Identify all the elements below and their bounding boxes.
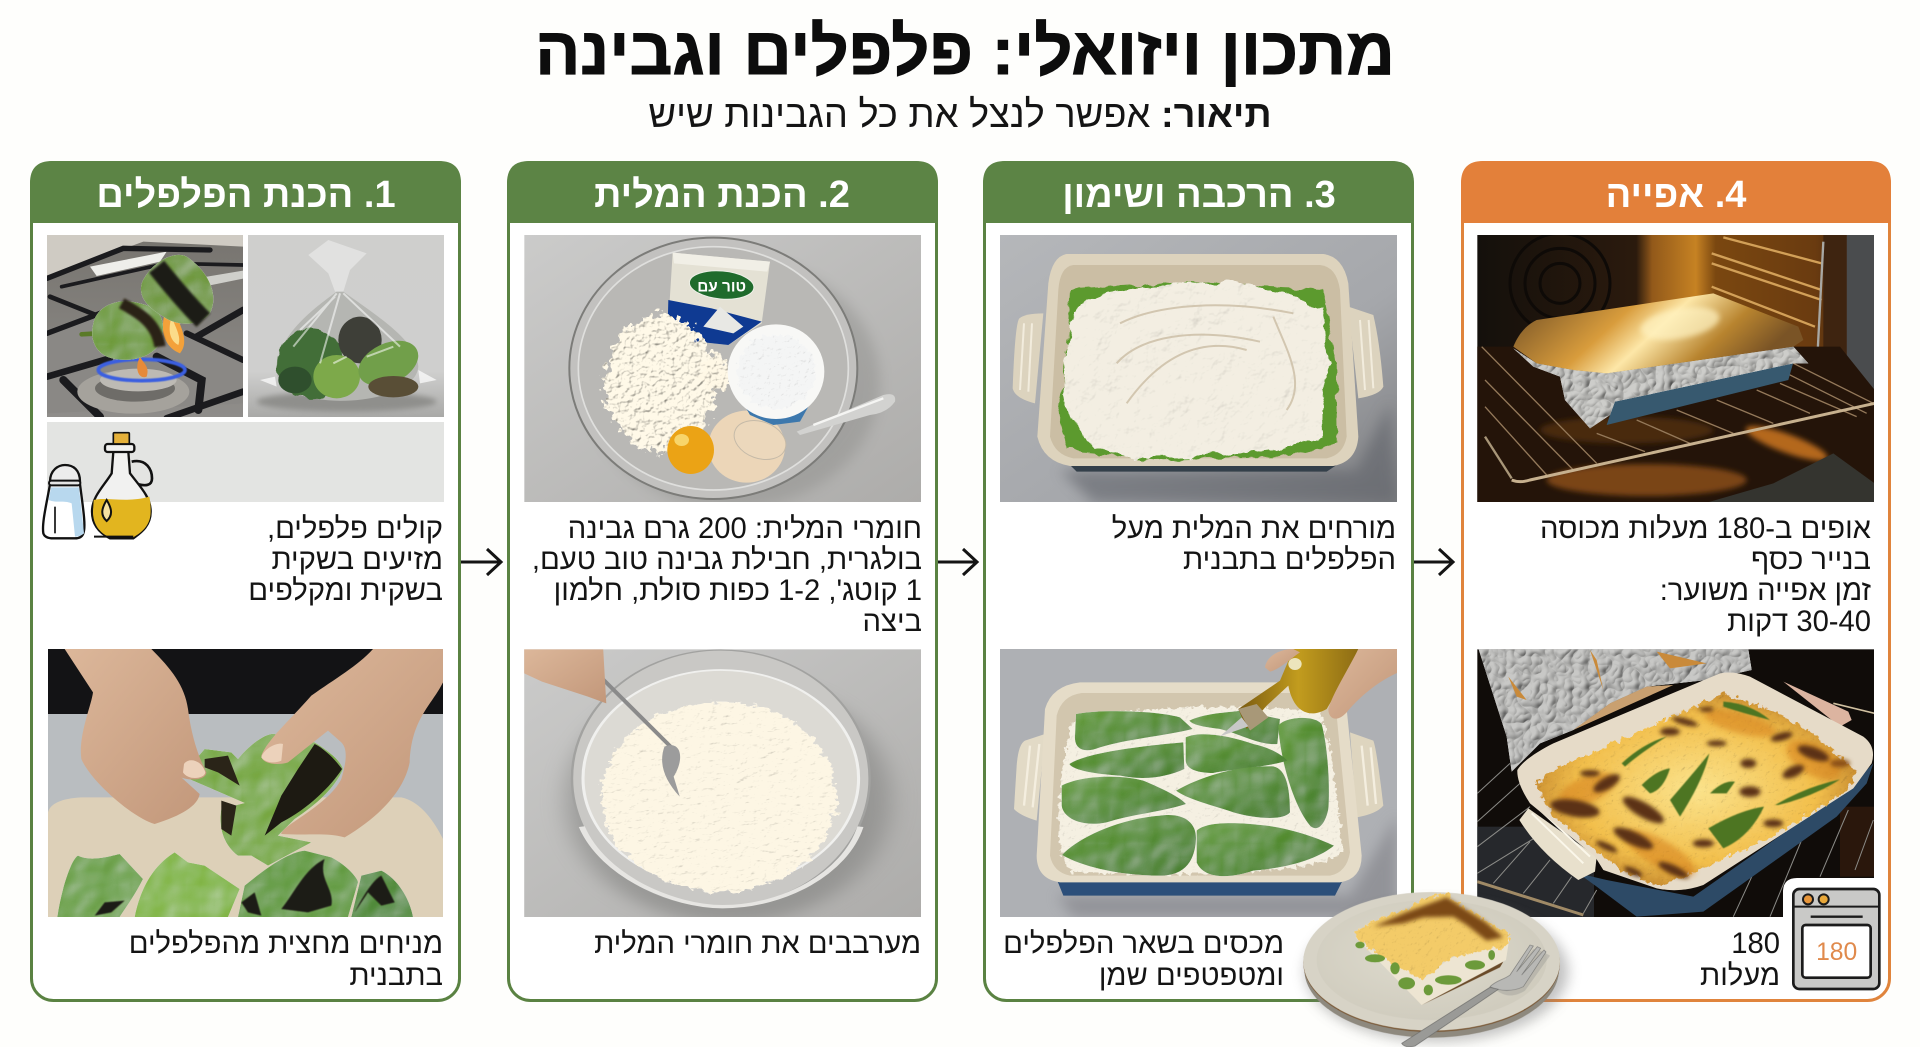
photo: peppers roasting on gas burner: [47, 235, 243, 418]
step 2 header: [507, 161, 938, 223]
step 1 text: roast and peel: בשקית ומקלפים: [248, 575, 443, 607]
step 3 text: cover and drizzle oil: ומטפטפים שמן: [1099, 960, 1284, 992]
panel: step 4 baking: [1461, 161, 1891, 1000]
step 3 text: spread the filling: מורחים את המלית מעל: [1112, 513, 1396, 545]
subtitle: תיאור: אפשר לנצל את כל הגבינות שיש: [648, 94, 1272, 136]
step 2 text: filling ingredients: 1 קוטג', 1-2 כפות סולת, חלמון: [554, 575, 922, 607]
step 1 text: half the peppers in the dish: בתבנית: [349, 960, 443, 992]
step 3 text: cover and drizzle oil: מכסים בשאר הפלפלים: [1003, 928, 1284, 960]
step 2 text: mix the filling: מערבבים את חומרי המלית: [594, 928, 921, 960]
title: מתכון ויזואלי: פלפלים וגבינה: [535, 14, 1395, 89]
step 2 text: filling ingredients: ביצה: [863, 606, 922, 638]
step 1 text: half the peppers in the dish: מניחים מחצית מהפלפלים: [129, 928, 443, 960]
step 3 header: 3. הרכבה ושימון: [1062, 174, 1336, 216]
step 4 text: bake covered: זמן אפייה משוער:: [1660, 575, 1872, 607]
photo: hands peeling pepper: [48, 649, 443, 917]
photo: foil-covered dish in hot oven: [1477, 233, 1875, 503]
step 4 text: bake covered: בנייר כסף: [1751, 544, 1871, 576]
arrow: step 3 to step 4: [1414, 549, 1453, 575]
photo: filling ingredients in glass bowl: טור עם: [697, 278, 746, 295]
icon: oven showing 180 degrees: 180: [1816, 939, 1857, 966]
photo: peppers layered with oil drizzle: [1000, 649, 1397, 917]
arrow: step 1 to step 2: [461, 549, 501, 575]
step 4 text: bake covered: 30-40 דקות: [1727, 606, 1871, 638]
step 4 text: 180 degrees: מעלות: [1700, 960, 1780, 992]
step 1 header: 1. הכנת הפלפלים: [96, 174, 396, 216]
step 2 text: filling ingredients: בולגרית, חבילת גבינה טוב טעם,: [532, 544, 922, 576]
step 4 text: 180 degrees: 180: [1731, 928, 1780, 960]
step 2 text: filling ingredients: חומרי המלית: 200 גרם גבינה: [568, 513, 922, 545]
panel: step 2 preparing the filling: [507, 161, 938, 1000]
step 2 header: 2. הכנת המלית: [594, 174, 850, 216]
icon: oven showing 180 degrees: [1793, 889, 1879, 989]
photo: filling spread over peppers in dish: [1000, 235, 1397, 503]
photo: mixed filling in bowl: [524, 649, 921, 923]
step 4 header: 4. אפייה: [1606, 174, 1746, 216]
step 1 header: [30, 161, 461, 223]
served slice on a plate: [1303, 892, 1568, 1047]
ingredient strip: [47, 422, 444, 502]
step 4 header: [1461, 161, 1891, 223]
step 3 header: [983, 161, 1414, 223]
panel: step 3 assembly and oil: [983, 161, 1414, 1000]
photo: peppers in plastic bag: [248, 235, 444, 417]
photo: filling ingredients in glass bowl: [524, 235, 921, 508]
step 3 text: spread the filling: הפלפלים בתבנית: [1183, 544, 1396, 576]
step 1 text: roast and peel: מזיעים בשקית: [271, 544, 443, 576]
step 4 text: bake covered: אופים ב-180 מעלות מכוסה: [1540, 513, 1871, 545]
icon: salt shaker and oil bottle: [43, 433, 152, 538]
photo: golden baked dish with foil removed: [1477, 649, 1875, 920]
arrow: step 2 to step 3: [938, 549, 977, 575]
step 1 text: roast and peel: קולים פלפלים,: [267, 513, 443, 545]
panel: step 1 preparing the peppers: [30, 161, 461, 1000]
